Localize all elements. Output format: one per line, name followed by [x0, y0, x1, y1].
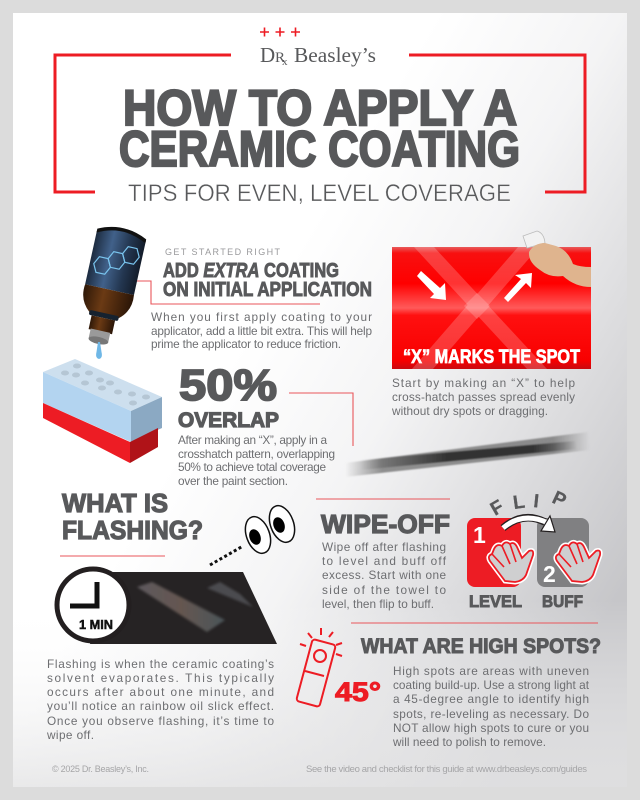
icon: hand 1	[489, 542, 533, 582]
label: buff: BUFF	[542, 592, 583, 611]
square: buff	[537, 518, 589, 587]
label: 45 degrees: 45°	[335, 677, 381, 707]
section: high spots	[351, 623, 601, 749]
text: high spots: NOT allow high spots to cure or you	[393, 721, 589, 735]
square: level	[467, 518, 521, 587]
text: overlap: crosshatch pattern, overlapping	[178, 447, 335, 461]
text: initial application: applicator, add a little bit extra. This will help	[151, 324, 372, 338]
text: flashing: solvent evaporates. This typically	[47, 671, 274, 685]
text: wipe-off: to level and buff off	[322, 554, 447, 568]
text: high spots: coating build-up. Use a strong light at	[393, 678, 590, 692]
label: flip: F	[487, 496, 508, 520]
text: overlap	[178, 433, 335, 488]
text: start with an x	[391, 376, 575, 418]
text: flashing: wipe off.	[46, 728, 94, 742]
label: flip: I	[532, 491, 540, 513]
arrow: down right	[417, 271, 446, 300]
icon: clock: 1 MIN	[79, 617, 113, 632]
arrow: flip	[503, 516, 555, 532]
logo: R	[275, 50, 285, 66]
X marks the spot image	[392, 231, 591, 369]
icon: clock	[57, 569, 129, 641]
heading: add extra coating: ON INITIAL APPLICATION	[163, 279, 372, 301]
label: flip	[487, 487, 570, 520]
text: initial application	[151, 310, 372, 351]
text: overlap: After making an “X”, apply in a	[178, 433, 327, 447]
text: wipe-off: side of the towel to	[322, 583, 446, 597]
text: high spots: will need to polish to remove.	[392, 735, 546, 749]
section: 50% overlap	[178, 361, 335, 488]
flashing paint panel	[90, 572, 277, 644]
footer copyright: © 2025 Dr. Beasley’s, Inc.	[52, 764, 149, 774]
heading: what is flashing: FLASHING?	[62, 515, 203, 545]
number 2: 2	[543, 561, 556, 587]
heading: what is flashing	[62, 488, 203, 545]
wipe streak	[345, 432, 590, 477]
text: wipe-off: excess. Start with one	[322, 568, 446, 582]
connector: overlap to streak	[289, 393, 353, 446]
logo	[260, 28, 376, 68]
text: high spots: a 45-degree angle to identify high	[393, 692, 589, 706]
heading: what is flashing: WHAT IS	[62, 488, 168, 518]
heading: add extra coating: ADD EXTRA COATING	[163, 260, 339, 282]
number 1: 1	[473, 522, 486, 548]
text: flashing	[46, 657, 274, 742]
section: 50% overlap: OVERLAP	[178, 409, 279, 432]
text: high spots: High spots are areas with uneven	[393, 664, 589, 678]
icon: eyes	[241, 502, 299, 557]
section: wipe-off	[316, 499, 450, 611]
connector: bottle to heading	[137, 281, 320, 304]
logo: Beasley’s	[294, 43, 376, 67]
text: wipe-off: level, then flip to buff.	[322, 597, 434, 611]
text: start with an x: cross-hatch passes spread evenly	[392, 390, 575, 404]
caption: “X” MARKS THE SPOT	[403, 347, 580, 368]
towel flip diagram	[467, 487, 600, 611]
text: initial application: When you first apply coating to your	[151, 310, 372, 324]
text: wipe-off	[322, 540, 447, 611]
text: start with an x: Start by making an “X” to help	[392, 376, 575, 390]
icon: flashlight	[296, 628, 342, 707]
text: flashing: occurs after about one minute, and	[47, 685, 274, 699]
section: get started right: GET STARTED RIGHT	[165, 247, 280, 257]
dotted line of sight	[210, 546, 243, 565]
text: flashing: you’ll notice an rainbow oil slick effect.	[47, 699, 274, 713]
icon: hand with applicator	[523, 231, 591, 287]
logo: D	[260, 43, 275, 67]
text: initial application: prime the applicator to reduce friction.	[151, 337, 341, 351]
heading: add extra coating	[163, 260, 372, 301]
icon: hand 2	[556, 542, 600, 582]
title	[119, 80, 520, 177]
text: start with an x: without dry spots or dragging.	[391, 404, 548, 418]
icon: bottle	[73, 223, 148, 349]
arrow: up right	[504, 273, 532, 302]
text: overlap: 50% to achieve total coverage	[178, 460, 326, 474]
title: HOW TO APPLY A	[123, 80, 517, 136]
title bracket	[55, 55, 585, 192]
text: high spots	[392, 664, 590, 749]
icon: drop	[96, 342, 102, 359]
text: overlap: over the paint section.	[178, 474, 288, 488]
section: wipe-off: WIPE-OFF	[321, 509, 450, 539]
title: CERAMIC COATING	[119, 121, 520, 177]
section: get started right	[151, 247, 372, 351]
label: level: LEVEL	[469, 592, 522, 611]
text: wipe-off: Wipe off after flashing	[322, 540, 446, 554]
section: high spots: WHAT ARE HIGH SPOTS?	[361, 635, 601, 658]
text: flashing: Flashing is when the ceramic coating’s	[47, 657, 274, 671]
logo: x	[282, 56, 288, 68]
section: 50% overlap: 50%	[179, 361, 277, 410]
label: flip: L	[512, 491, 527, 514]
subtitle: TIPS FOR EVEN, LEVEL COVERAGE	[128, 180, 511, 207]
text: high spots: spots, re-leveling as necessary. Do	[393, 707, 589, 721]
icon: applicator sponge	[43, 359, 162, 463]
footer link: See the video and checklist for this guide at www.drbeasleys.com/guides	[306, 764, 587, 775]
label: flip: P	[549, 487, 570, 512]
text: flashing: Once you observe flashing, it’s time to	[47, 714, 274, 728]
